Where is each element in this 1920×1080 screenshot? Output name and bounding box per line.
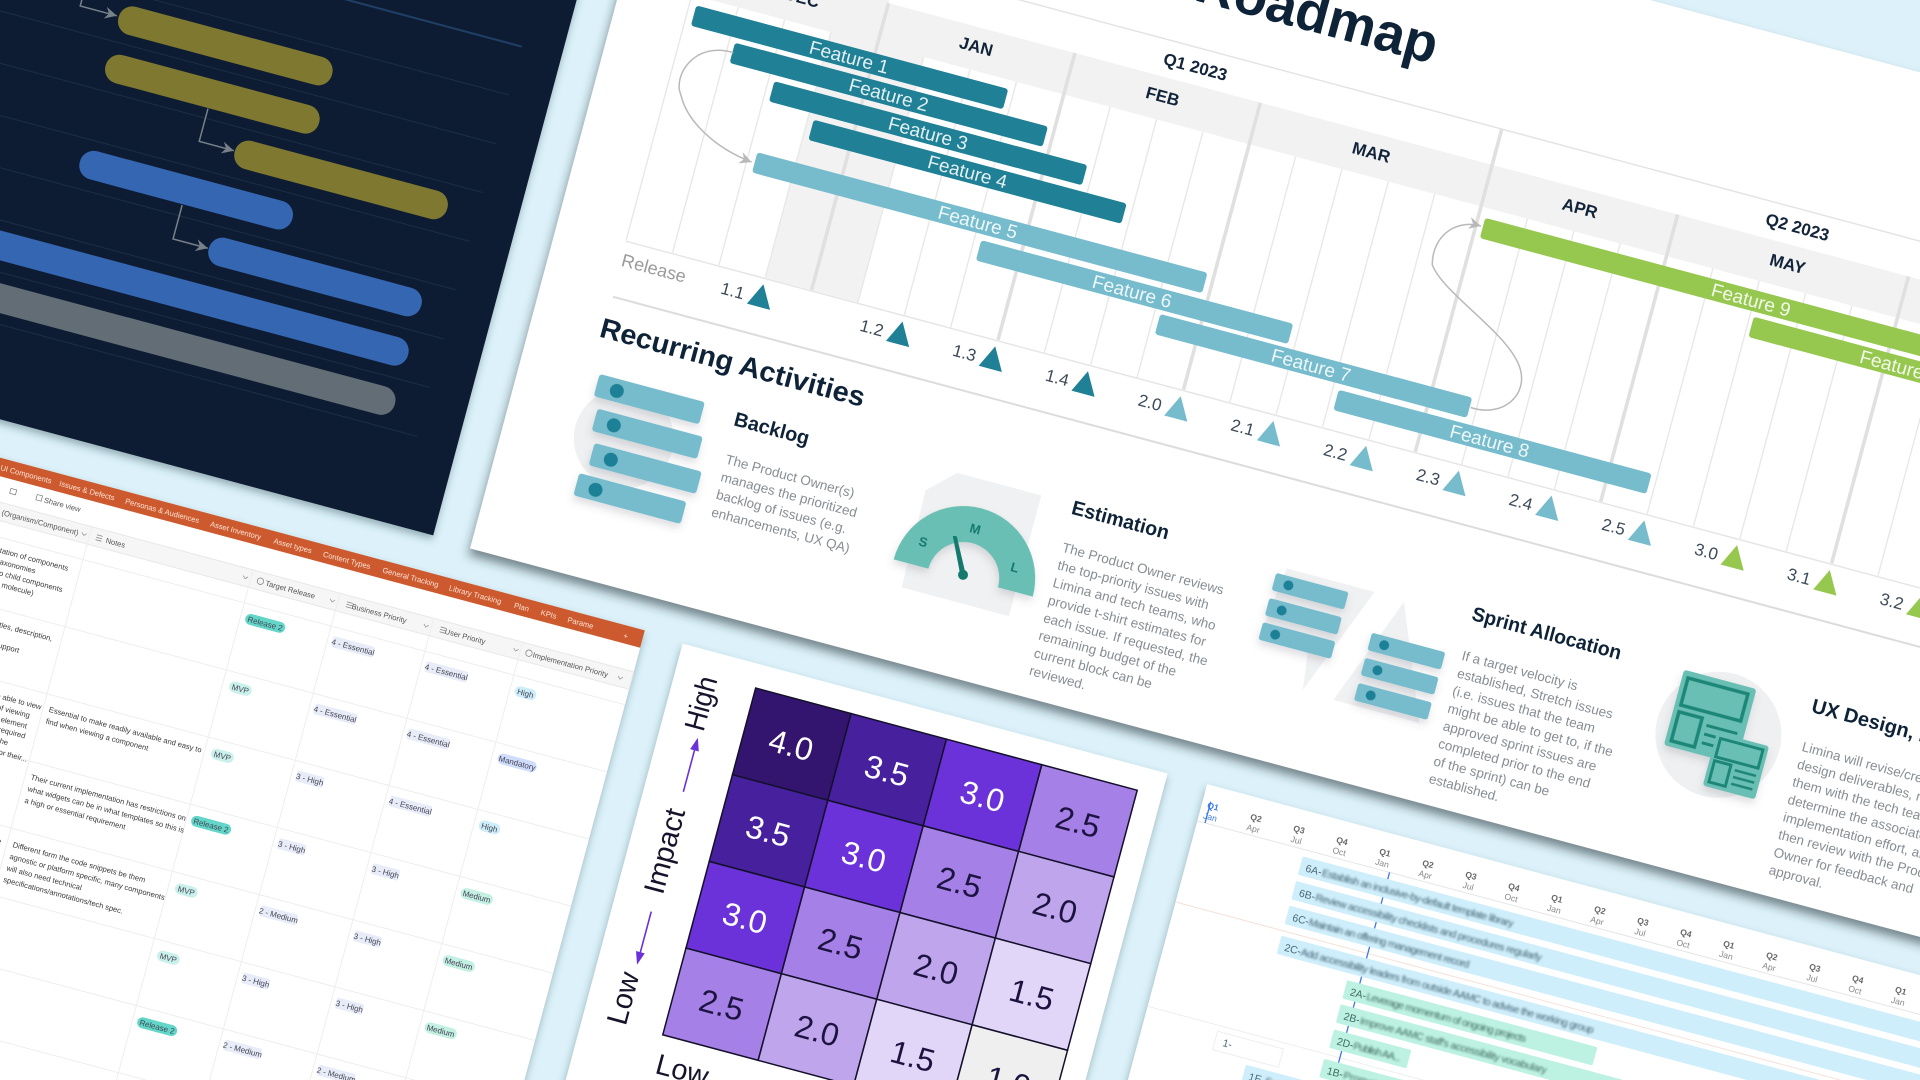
text: ux design description: Owner for feedback and [1772,845,1915,896]
tab bar: Issues & Defects [58,479,116,502]
bar 6B: 6B- [1298,887,1317,903]
release milestones: 2.1 [1229,415,1257,440]
timeline quarter header: Apr [1761,960,1777,973]
release milestones: 1.3 [951,341,978,365]
feature 6 [976,240,1293,345]
text: backlog description: manages the prioritized [719,469,859,520]
timeline quarter header: Q4 [1335,835,1349,847]
timeline quarter header: Jan [1374,857,1390,870]
heatmap values: 1.5 [887,1033,939,1079]
feature 3: Feature 3 [886,114,970,155]
tab bar: General Tracking [381,566,440,589]
row 4 tags [190,815,494,906]
icon: estimation gauge [887,463,1059,621]
timeline quarter header: Jul [1805,972,1819,985]
row 5 tags: 3 - High [353,932,382,948]
text: sprint allocation description: established, Stretch issues [1456,666,1615,722]
timeline quarter header: Jan [1546,903,1562,916]
icon: estimation gauge: S [917,534,930,550]
bar 1B [1319,1059,1710,1080]
row 7 tags: Release 2 [138,1018,176,1036]
text: estimation description: current block can be [1032,645,1154,691]
grid lines [0,417,634,1080]
column headers: (Organism/Component) [1,508,80,537]
timeline quarter header: Oct [1847,983,1863,997]
row 6 tags: 3 - High [241,974,270,990]
tab bar [0,375,645,648]
feature 5: Feature 5 [936,202,1020,244]
row 1 tags [244,613,538,701]
heading: estimation: Estimation [1069,497,1172,544]
bar 2A: 2A- [1349,986,1368,1002]
tab bar: Asset types [273,536,313,555]
feature 8 [1333,390,1652,495]
timeline quarter header: Q4 [1507,881,1521,893]
heatmap values: 1.5 [1006,972,1058,1018]
feature 2: Feature 2 [847,75,930,116]
release label: Release [619,250,688,287]
bar 2D [1329,1029,1411,1068]
text: backlog description: The Product Owner(s) [724,452,856,501]
heatmap values: 2.5 [933,859,985,905]
timeline quarter header: Jan [1202,810,1218,824]
row 7 tags [136,1016,357,1080]
heatmap values: 3.0 [719,895,771,941]
notes column text: agnostic or platform specific, many components [9,852,166,902]
feature 5 [752,152,1208,294]
row 5 tags: Medium [444,956,474,972]
feature 1 [691,5,1008,110]
bar 6A [1298,856,1920,1080]
feature 6: Feature 6 [1090,272,1174,313]
notes column text: Their current implementation has restrictions on [30,773,187,823]
text: estimation description: the top-priority issues with [1056,557,1211,612]
text: backlog description: backlog of issues (e.g. [715,487,848,536]
timeline quarter header: Q3 [1464,869,1478,882]
panel: dark gantt chart [0,0,719,535]
tab bar: + [622,631,630,641]
heatmap values: 2.0 [1029,885,1081,931]
connector: arrow into first olive bar [80,0,125,16]
row 3 tags [210,748,502,836]
bar 6C: Maintain an offering management record [1307,916,1471,971]
bar: blue 1 [76,148,296,233]
row 1 tags: High [516,687,534,700]
release milestones: 2.5 [1600,515,1627,539]
row 6 tags: 3 - High [335,999,364,1015]
month labels: FEB [1144,83,1181,110]
row 6 tags: MVP [159,952,178,965]
notes column text: will also need technical [4,863,83,892]
icon: sprint allocation stacks [1248,566,1456,725]
heatmap values [695,722,1104,1080]
heatmap values: 2.5 [1052,799,1104,845]
feature 4 [808,120,1127,225]
feature 8: Feature 8 [1447,421,1531,463]
row 1 tags: Release 2 [246,615,284,633]
row 4 tags: 3 - High [277,839,306,855]
timeline quarter header [1202,800,1909,1008]
text: estimation description: remaining budget of the [1037,628,1178,679]
tab bar: Parame [567,615,595,631]
notes column text: specifications/annotations/tech spec. [2,875,124,916]
bar 1E [1241,1065,1729,1080]
heatmap grid [663,688,1137,1080]
feature 9 [1480,218,1920,385]
notes column text: a high or essential requirement [24,796,127,832]
row 1 tags: 4 - Essential [331,637,376,658]
feature 7 [1155,314,1472,419]
column headers: Notes [105,536,126,550]
text: backlog description: enhancements, UX QA) [710,505,851,556]
row 4 tags: 3 - High [371,864,400,880]
row 6 tags [156,949,458,1040]
bar 2B: Improve AAMC staff's accessibility vocabulary [1359,1015,1549,1077]
heading: backlog: Backlog [732,409,812,450]
text: estimation description: provide t-shirt estimates for [1047,593,1208,649]
timeline quarter header: Jul [1290,834,1303,846]
box 1-: 1- [1221,1037,1234,1051]
left column text: element [0,715,29,731]
text: sprint allocation description: completed prior to the end [1437,736,1592,791]
bar: blue 2 [205,235,425,319]
icon: ux design documents [1641,658,1796,812]
bar 6B [1291,881,1920,1080]
month labels [782,0,1809,278]
timeline quarter header: Q4 [1679,927,1693,940]
quarter labels: Q2 2023 [1763,210,1831,245]
row 2 tags: 4 - Essential [313,705,358,725]
arrow: down [633,910,656,966]
heading: recurring activities: Recurring Activities [597,312,869,413]
axis label: high: High [679,673,724,734]
axis label: low: Low [601,968,646,1028]
feature 7: Feature 7 [1269,346,1353,387]
feature 2 [729,43,1048,148]
bar: olive 1 [115,3,336,88]
row 2 tags: 4 - Essential [406,729,451,750]
month labels: JAN [957,33,995,60]
text: sprint allocation description: might be able to get to, if the [1446,701,1615,759]
timeline quarter header: Q2 [1593,904,1607,916]
dependency arrow: feature 7 to feature 9 [1397,216,1558,419]
month labels: MAR [1350,138,1392,167]
month labels: MAY [1768,250,1808,278]
release milestones: 3.0 [1692,540,1720,564]
column headers: Business Priority [351,602,408,625]
axis label: impact: Impact [639,805,692,897]
release milestones: 1.2 [858,316,886,341]
column headers: Target Release [264,579,316,601]
timeline quarter header: Jan [1890,995,1906,1008]
timeline quarter header: Q3 [1292,823,1306,836]
timeline quarter header: Q1 [1550,892,1564,905]
heatmap values: 2.0 [791,1007,843,1054]
column headers [0,417,634,689]
row 7 tags: 2 - Medium [222,1041,263,1060]
timeline quarter header: Q2 [1421,858,1435,870]
feature 9: Feature 9 [1709,280,1793,322]
row 5 tags [174,882,476,973]
text: sprint allocation description: (i.e. issues that the team [1451,683,1597,736]
panel: main roadmap slide [470,0,1920,1040]
timeline quarter header: Apr [1245,822,1261,835]
tab bar: Library Tracking [448,583,503,606]
timeline quarter header: Oct [1331,845,1348,858]
column headers: Implementation Priority [532,650,609,679]
text: sprint allocation description: approved sprint issues are [1441,718,1598,774]
release milestones: 1.1 [719,279,747,303]
row 3 tags: 4 - Essential [388,797,433,817]
row 2 tags [228,680,538,773]
tab bar: Content Types [322,550,372,571]
feature 10 [1748,317,1920,420]
bar: olive 3 [231,137,451,222]
row 5 tags: 2 - Medium [258,906,299,925]
release milestones [719,274,1920,621]
box 1- [1213,1031,1283,1067]
notes column text: find when viewing a component [45,717,150,753]
bar 6B: Review accessibility checklists and procedures regularly [1314,892,1544,964]
panel: spreadsheet table [0,375,645,1080]
row 3 tags: 3 - High [295,772,324,788]
row 6 tags: Medium [426,1023,456,1039]
bar 2C [1277,936,1920,1080]
timeline quarter header: Q2 [1249,812,1263,824]
icon: backlog stack [558,371,719,526]
text: sprint allocation description: established. [1427,771,1501,804]
release milestones: 2.2 [1321,440,1349,465]
timeline quarter header: Apr [1589,914,1605,927]
bar: olive 2 [102,52,323,137]
timeline quarter header: Oct [1675,937,1691,950]
tab bar: UI Components [0,463,53,486]
icon: estimation gauge: M [968,520,983,538]
release milestones: 2.4 [1507,490,1535,514]
text: estimation description: reviewed. [1028,663,1087,692]
timeline quarter header: Q1 [1378,846,1392,859]
bar 2C: 2C- [1283,942,1303,958]
heading: sprint allocation: Sprint Allocation [1469,603,1624,664]
release milestones: 2.0 [1136,391,1164,415]
column headers: User Priority [444,627,487,646]
row 3 tags: MVP [213,750,232,763]
row 2 tags: MVP [231,683,250,696]
text: ux design description: approval. [1767,862,1825,891]
timeline quarter header: Q3 [1808,961,1822,974]
text: sprint allocation description: If a target velocity is [1460,648,1580,693]
feature bars [638,5,1920,592]
quarter labels [1161,49,1831,246]
tab bar: Plan [513,601,530,614]
row 2 tags: Mandatory [498,754,536,773]
heatmap values: 3.5 [861,748,913,794]
month labels: APR [1560,195,1600,222]
bar: grey [0,238,399,418]
feature 3 [769,81,1087,186]
bar 2B: 2B- [1342,1011,1362,1027]
left column text [0,538,79,847]
heatmap values: 3.5 [742,808,794,854]
icon: estimation gauge: L [1009,559,1021,576]
release milestones: 2.3 [1414,465,1442,490]
timeline quarter header: Oct [1503,891,1519,904]
notes column text: Different form the code snippets be them [12,840,146,884]
text: sprint allocation description: of the sprint) can be [1432,754,1551,799]
timeline quarter header: Q1 [1894,984,1908,997]
bar 2D: 2D- [1335,1036,1355,1052]
row 1 tags: 4 - Essential [424,662,469,682]
toolbar: share view [9,487,82,514]
timeline quarter header: Jan [1718,949,1734,962]
bar: blue 3 [0,189,412,369]
heatmap values: 3.0 [838,834,890,880]
bar 6C: 6C- [1291,912,1311,928]
release milestones: 3.2 [1878,589,1906,614]
bar 2A [1342,980,1597,1065]
heatmap values: 2.5 [695,982,748,1028]
today marker [1144,802,1395,1080]
tab bar: KPIs [540,608,558,621]
row 3 tags: High [480,821,499,834]
heatmap values: 4.0 [765,722,817,768]
connector: olive 2 to olive 3 [199,109,243,151]
timeline quarter header: Q1 [1206,800,1220,813]
connector: blue 1 to blue 2 [173,205,217,248]
feature 1: Feature 1 [807,38,891,79]
gantt grid [611,0,1920,745]
row 5 tags: MVP [177,884,196,898]
notes column text: what widgets can be in what templates so this is [26,784,185,835]
bar 2B [1336,1004,1631,1080]
timeline quarter header: Apr [1417,868,1433,881]
bar 6A: Establish an inclusive-by-default template library [1321,867,1516,930]
release milestones: 3.1 [1785,565,1813,589]
text: estimation description: The Product Owner reviews [1061,540,1226,598]
tab bar: Personas & Audiences [124,497,201,525]
timeline quarter header: Jul [1633,926,1647,939]
toolbar: share view: Share view [43,496,82,514]
tab bar: Asset Inventory [209,519,262,542]
dependency arrow: feature 2 to feature 5 [664,41,778,162]
row 4 tags: Release 2 [192,817,230,835]
panel: timeline gantt [1078,784,1920,1080]
panel: heatmap matrix [561,644,1168,1080]
bar 2D: Publish AA... [1352,1040,1402,1064]
bar 6C [1285,906,1920,1080]
timeline quarter header: Jul [1462,880,1475,892]
gantt header [626,0,1920,689]
timeline quarter header: Q2 [1765,950,1779,963]
timeline quarter header: Q4 [1851,973,1865,986]
quarter labels: Q1 2023 [1161,50,1229,85]
bar 6A: 6A- [1304,863,1324,879]
heatmap values: 3.0 [956,773,1008,820]
text: estimation description: each issue. If requested, the [1042,610,1210,669]
feature 4: Feature 4 [925,152,1010,194]
bar 2A: Leverage momentum of ongoing projects [1365,991,1528,1045]
timeline quarter header: Q3 [1636,915,1650,928]
notes column text: Essential to make readily available and easy to [48,705,203,755]
timeline quarter header: Q1 [1722,938,1736,951]
text: estimation description: Limina and tech teams, who [1051,575,1217,633]
arrow: up [679,737,702,793]
heatmap values: 2.5 [814,921,867,967]
notes column text [1,705,207,926]
row 4 tags: Medium [462,889,492,905]
release milestones: 1.4 [1043,366,1071,390]
bar 2C: Add accessibility leaders from outside AAMC to advise the working group [1299,946,1595,1036]
heatmap values: 2.0 [910,946,962,992]
